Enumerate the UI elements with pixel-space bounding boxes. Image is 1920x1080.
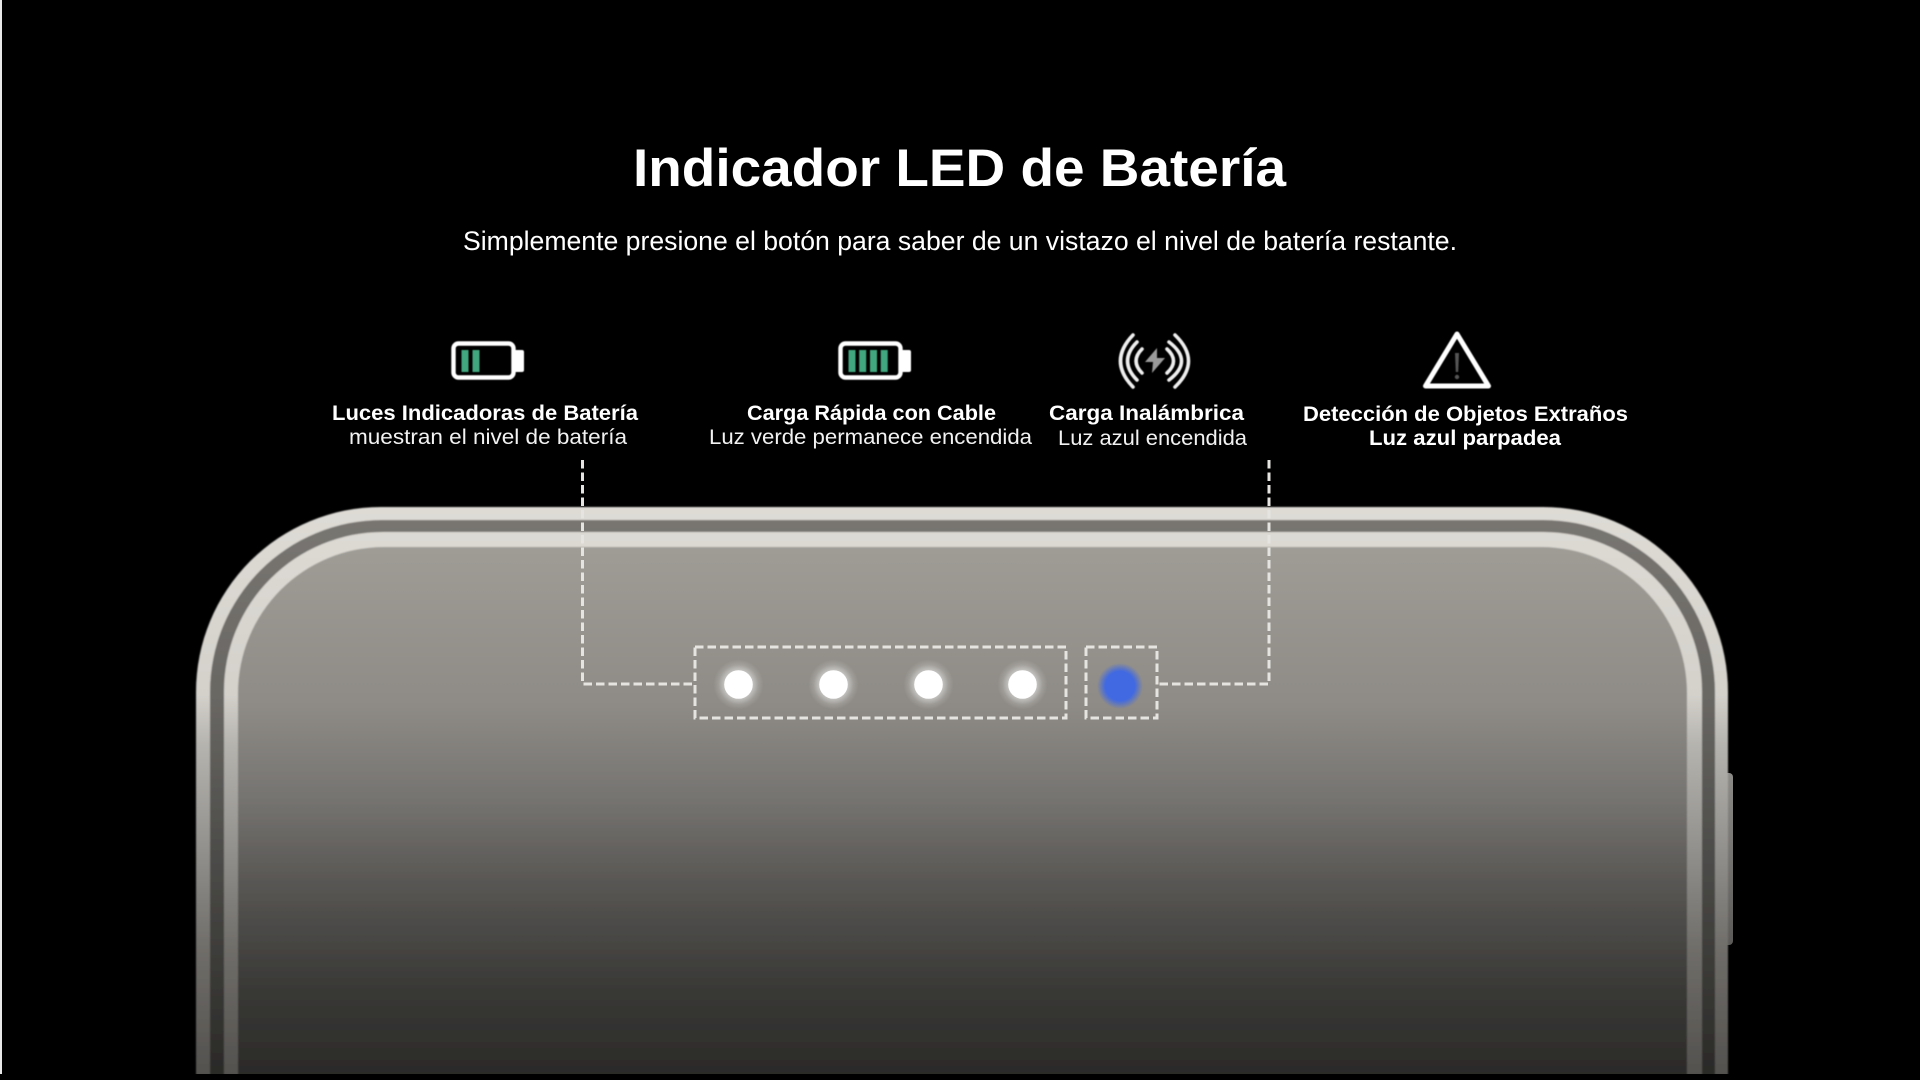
label: fast cable charging: Luz verde permanece encendida: [709, 425, 1032, 449]
left edge line: [0, 0, 2, 1074]
label: wireless charging: [1049, 401, 1247, 450]
label: foreign object detection: Luz azul parpadea: [1369, 426, 1562, 450]
icon: warning triangle: [1426, 334, 1488, 386]
label: fast cable charging: Carga Rápida con Cable: [747, 401, 996, 425]
icon: battery low: [454, 344, 524, 378]
icon: battery full: [840, 344, 911, 378]
label: fast cable charging: [709, 401, 1032, 449]
LED 3: [904, 660, 954, 710]
label: foreign object detection: [1303, 402, 1628, 450]
icon: wireless charging: [1120, 335, 1188, 387]
label: battery indicator lights: Luces Indicadoras de Batería: [332, 401, 639, 425]
label: battery indicator lights: muestran el nivel de batería: [349, 425, 627, 449]
right connector dashed line: [1158, 460, 1269, 684]
left connector dashed line: [582, 460, 694, 684]
device: power bank body: [196, 507, 1733, 1076]
dashed box: battery LEDs: [695, 647, 1066, 718]
subtitle: Simplemente presione el botón para saber de un vistazo el nivel de batería restante.: [463, 226, 1457, 256]
label: wireless charging: Carga Inalámbrica: [1049, 401, 1245, 425]
label: foreign object detection: Detección de Objetos Extraños: [1303, 402, 1628, 426]
dashed box: status LED: [1086, 647, 1157, 718]
LED blue: [1097, 663, 1143, 709]
side button: [1727, 773, 1733, 945]
LED 4: [998, 660, 1048, 710]
LED 1: [714, 660, 764, 710]
LED 2: [808, 660, 858, 710]
label: wireless charging: Luz azul encendida: [1058, 426, 1247, 450]
title: Indicador LED de Batería: [633, 139, 1287, 198]
label: battery indicator lights: [332, 401, 639, 449]
